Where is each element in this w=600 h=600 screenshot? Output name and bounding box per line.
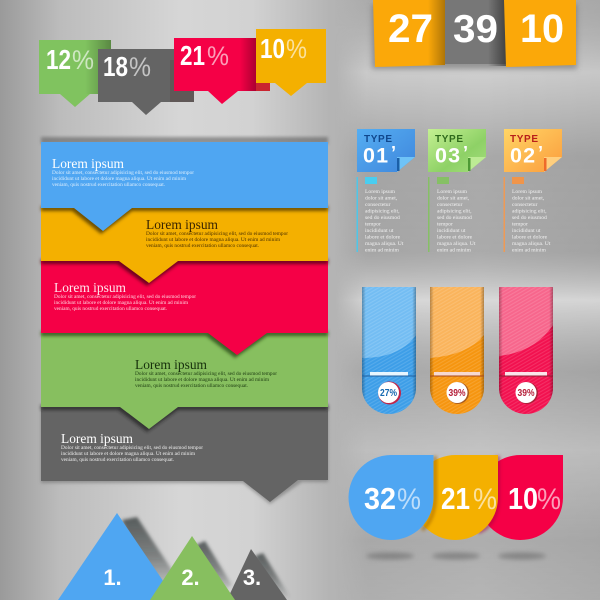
tag: 21% red: %	[207, 41, 229, 71]
pill: 27% blue: 27%	[380, 388, 397, 399]
banner: blue: Dolor sit amet, consectetur adipisicing elit, sed do eiusmod tempor	[52, 171, 194, 176]
description: labore et dolore	[365, 234, 401, 240]
tag: 12% green: %	[72, 45, 94, 75]
card: 39 grey	[444, 0, 506, 66]
description: magna aliqua. Ut	[512, 241, 551, 247]
rule	[504, 177, 505, 252]
banner: blue shadow	[41, 206, 328, 234]
yellow drop shadow	[478, 456, 498, 532]
red tag back fold	[240, 38, 270, 91]
swatch	[437, 177, 449, 184]
description: Lorem ipsum	[365, 189, 396, 195]
banner: yellow: Dolor sit amet, consectetur adipisicing elit, sed do eiusmod tempor	[146, 232, 288, 237]
drop: 10% red: %	[537, 483, 561, 516]
banner: yellow: veniam, quis nostrud exercitation ullamco consequat.	[146, 244, 259, 249]
banner: grey: Lorem ipsum	[61, 431, 133, 446]
pill: 27% blue	[362, 287, 416, 414]
triangle: 1 blue	[58, 513, 176, 600]
drop: 21% yellow	[413, 455, 498, 540]
card: type 03: 03	[435, 144, 461, 168]
banner: grey: incididunt ut labore et dolore magna aliqua. Ut enim ad minim	[61, 452, 195, 457]
description: consectetur	[437, 202, 463, 208]
drop: 32% blue: %	[397, 483, 421, 516]
column: type 02	[504, 129, 562, 254]
banner: red: incididunt ut labore et dolore magna aliqua. Ut enim ad minim	[54, 301, 188, 306]
pill: 39% red	[499, 287, 553, 414]
blue drop shadow	[422, 456, 435, 530]
banner: green shadow	[41, 405, 328, 432]
triangle: 3 grey	[227, 549, 287, 600]
column: type 01	[356, 129, 415, 254]
description: consectetur	[512, 202, 538, 208]
rule	[356, 177, 358, 252]
tag: 18% grey: 18	[103, 51, 128, 82]
description: sed do eiusmod	[365, 215, 400, 221]
banner: red: Dolor sit amet, consectetur adipisicing elit, sed do eiusmod tempor	[54, 295, 196, 300]
description: labore et dolore	[437, 234, 473, 240]
banner: yellow shadow	[41, 259, 328, 286]
banner: green: Dolor sit amet, consectetur adipisicing elit, sed do eiusmod tempor	[135, 372, 277, 377]
triangle: 2 green	[150, 536, 235, 600]
description: adipisicing elit,	[512, 208, 547, 214]
drop shadows	[366, 552, 546, 560]
description: dolor sit amet,	[437, 196, 470, 202]
drop: 10% red	[478, 455, 563, 540]
banner: grey	[41, 405, 328, 504]
drop: 32% blue: 32	[364, 481, 396, 516]
card: type 01: 01	[363, 144, 389, 168]
card: type 02: 02	[510, 144, 536, 168]
numbered triangles	[58, 513, 290, 600]
card: 10 yellow	[504, 0, 576, 67]
tag: 10% yellow: 10	[260, 33, 285, 64]
card: type 02	[504, 129, 562, 172]
number cards 27 39 10	[372, 0, 577, 69]
card: 39 grey: 39	[453, 8, 498, 51]
card: 27 yellow: 27	[388, 7, 433, 51]
card: 10 yellow: 10	[520, 7, 564, 51]
description: consectetur	[365, 202, 391, 208]
banner: blue: incididunt ut labore et dolore magna aliqua. Ut enim ad minim	[52, 177, 186, 182]
tag: 10% yellow: %	[286, 34, 307, 64]
pill: 39% orange	[430, 287, 484, 414]
description: Lorem ipsum	[437, 189, 468, 195]
description: magna aliqua. Ut	[437, 241, 476, 247]
card: type 03	[428, 129, 486, 172]
description: enim ad minim	[437, 248, 472, 254]
tag: 10% yellow	[256, 29, 326, 96]
banner: red	[41, 259, 328, 355]
drop: 10% red: 10	[508, 481, 538, 516]
pill: 39% red: 39%	[518, 388, 535, 399]
percentage speech tags	[39, 29, 326, 115]
description: adipisicing elit,	[365, 208, 400, 214]
triangle shadows	[122, 517, 290, 600]
description: labore et dolore	[512, 234, 548, 240]
tag: 12% green	[39, 40, 111, 107]
card: type 02: ’	[538, 143, 543, 163]
banner: yellow: incididunt ut labore et dolore magna aliqua. Ut enim ad minim	[146, 238, 280, 243]
banner: grey: Dolor sit amet, consectetur adipisicing elit, sed do eiusmod tempor	[61, 446, 203, 451]
description: enim ad minim	[512, 248, 547, 254]
description: magna aliqua. Ut	[365, 241, 404, 247]
drop: 21% yellow: %	[473, 483, 497, 516]
tag: 21% red: 21	[180, 40, 205, 71]
banner: yellow: Lorem ipsum	[146, 217, 218, 232]
column: type 03	[428, 129, 486, 254]
tag: 21% red	[174, 38, 256, 104]
description: incididunt ut	[512, 228, 541, 234]
triangle: 2 green: 2.	[181, 565, 200, 590]
type columns	[356, 129, 562, 254]
tag: 12% green: 12	[46, 44, 71, 75]
banner: blue: Lorem ipsum	[52, 156, 124, 171]
card: type 01	[357, 129, 415, 172]
banner: blue: veniam, quis nostrud exercitation ullamco consequat.	[52, 183, 165, 188]
description: incididunt ut	[437, 228, 466, 234]
drop: 32% blue	[349, 455, 434, 540]
description: tempor	[512, 222, 528, 228]
card: type 03: ’	[463, 143, 468, 163]
swatch	[365, 177, 377, 184]
glossy pills	[362, 287, 553, 414]
card: type 03: TYPE	[435, 134, 463, 145]
banner: green: Lorem ipsum	[135, 357, 207, 372]
banner: green	[41, 331, 328, 429]
description: dolor sit amet,	[512, 196, 545, 202]
banner: red shadow	[41, 331, 328, 358]
pill: 39% orange: 39%	[448, 388, 466, 399]
tag: 18% grey	[98, 49, 194, 115]
description: incididunt ut	[365, 228, 394, 234]
triangle: 3 grey: 3.	[243, 565, 261, 590]
description: tempor	[365, 222, 381, 228]
card: 27 yellow	[373, 0, 445, 67]
description: enim ad minim	[365, 248, 400, 254]
card: type 02: TYPE	[510, 134, 538, 145]
triangle: 1 blue: 1.	[103, 565, 122, 590]
description: tempor	[437, 222, 453, 228]
description: sed do eiusmod	[437, 215, 472, 221]
percentage drops	[349, 455, 563, 560]
swatch	[512, 177, 524, 184]
banner: green: incididunt ut labore et dolore magna aliqua. Ut enim ad minim	[135, 378, 269, 383]
stacked ribbon banners	[41, 137, 328, 504]
card: type 01: ’	[391, 143, 396, 163]
drop: 21% yellow: 21	[441, 481, 470, 516]
banner: blue	[41, 142, 328, 231]
card: type 01: TYPE	[364, 134, 392, 145]
banner: green: veniam, quis nostrud exercitation ullamco consequat.	[135, 384, 248, 389]
banner: red: veniam, quis nostrud exercitation ullamco consequat.	[54, 307, 167, 312]
description: dolor sit amet,	[365, 196, 398, 202]
description: Lorem ipsum	[512, 189, 543, 195]
rule	[428, 177, 430, 252]
description: sed do eiusmod	[512, 215, 547, 221]
banner: red: Lorem ipsum	[54, 280, 126, 295]
banner top shadow	[41, 137, 328, 144]
banner: grey: veniam, quis nostrud exercitation ullamco consequat.	[61, 458, 174, 463]
tag: 18% grey: %	[129, 52, 151, 82]
banner: yellow	[41, 206, 328, 283]
description: adipisicing elit,	[437, 208, 472, 214]
